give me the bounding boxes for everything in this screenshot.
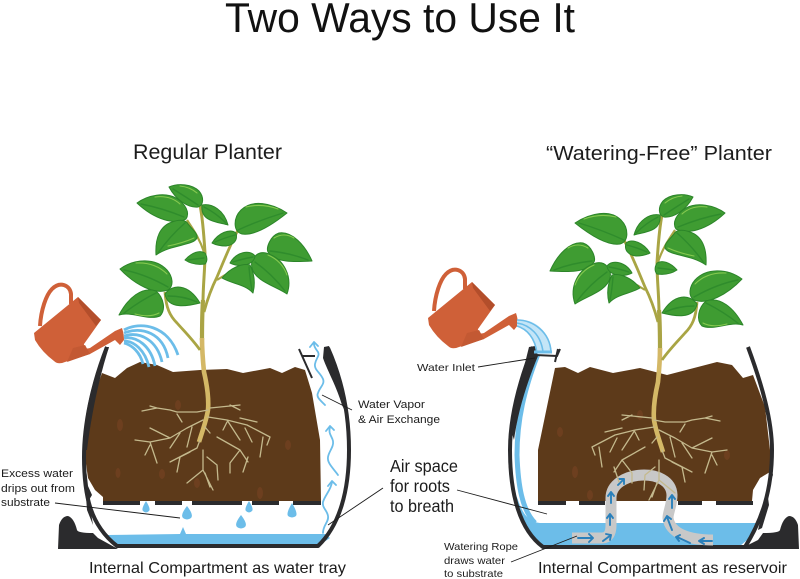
caption: water tray: Internal Compartment as water tray — [89, 560, 346, 577]
caption: reservoir: Internal Compartment as reservoir — [538, 560, 788, 577]
heading: watering-free planter: “Watering-Free” Planter — [546, 142, 772, 165]
soil — [538, 362, 770, 501]
drainage strips — [103, 501, 321, 505]
label: watering rope: draws water — [444, 555, 506, 567]
watering rope — [572, 475, 713, 544]
label: water vapor — [322, 395, 440, 426]
label: excess water: Excess water — [1, 468, 73, 480]
panel: regular planter — [58, 342, 349, 549]
heading: regular planter: Regular Planter — [133, 141, 282, 164]
panel: watering-free planter — [510, 346, 799, 549]
label: air space: Air space — [390, 456, 458, 476]
label: watering rope — [444, 536, 577, 579]
label: excess water: substrate — [1, 497, 50, 509]
water drops — [142, 501, 296, 528]
plant: regular planter — [119, 185, 312, 490]
label: water inlet: Water Inlet — [417, 362, 475, 374]
planter wall — [510, 346, 799, 549]
drainage strips — [538, 501, 753, 505]
water stream into inlet — [517, 320, 552, 353]
soil — [85, 362, 321, 501]
label: excess water — [1, 468, 180, 518]
label: watering rope: Watering Rope — [444, 541, 518, 553]
plant: watering-free planter — [550, 195, 743, 500]
label: water vapor: & Air Exchange — [358, 414, 440, 426]
water vapor squiggles — [310, 342, 338, 533]
label: air space: to breath — [390, 496, 454, 516]
label: air space: for roots — [390, 476, 450, 496]
planter wall — [58, 346, 349, 549]
reservoir water — [514, 490, 757, 546]
icon: watering can left — [34, 285, 124, 363]
water arcs from left can — [124, 326, 178, 367]
water tray — [107, 527, 330, 546]
water channel — [517, 354, 538, 523]
label: air space — [328, 456, 547, 525]
label: water vapor: Water Vapor — [358, 399, 425, 411]
label: water inlet — [417, 358, 535, 374]
icon: watering can right — [428, 270, 518, 348]
label: excess water: drips out from — [1, 483, 75, 495]
